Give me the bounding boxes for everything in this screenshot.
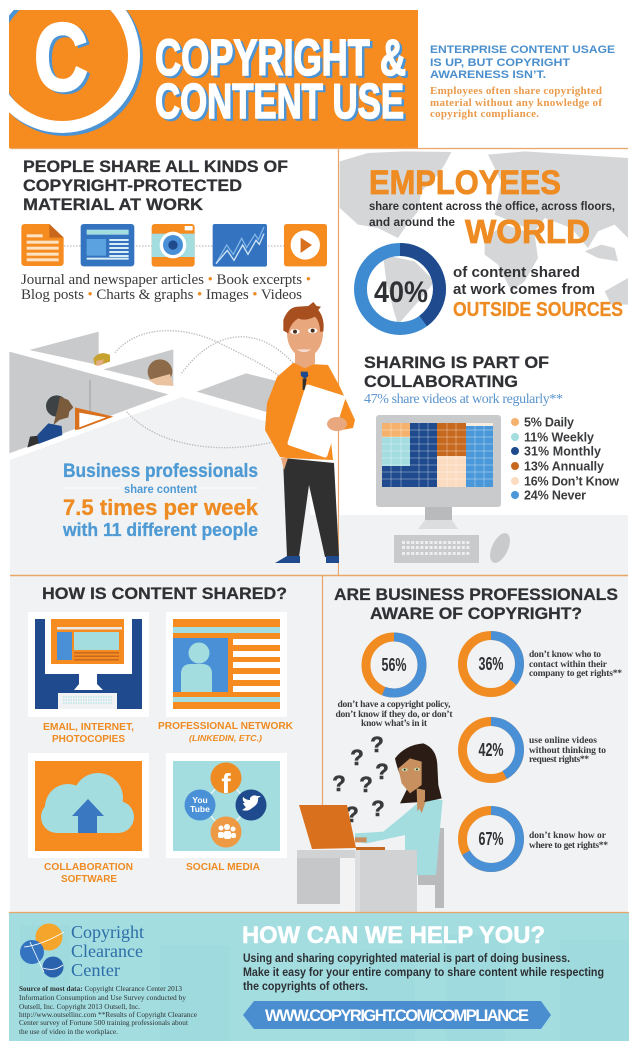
icon: cloud upload	[41, 773, 134, 833]
hand	[355, 837, 367, 842]
chart: 67% donut: 67%	[478, 829, 504, 849]
chart: 42% donut	[462, 722, 520, 778]
title: CONTENT USE	[155, 75, 404, 129]
legend	[511, 416, 619, 502]
text: online videos: use online videos	[529, 736, 597, 746]
illustration: businessman holding tablet	[265, 302, 355, 563]
copyright symbol: C	[34, 4, 88, 111]
heading: aware of copyright	[334, 586, 618, 623]
panel: employees world map background	[340, 151, 628, 325]
heading: sharing is part of collaborating: COLLABORATING	[364, 373, 518, 391]
label: SOFTWARE	[61, 873, 117, 885]
icon: document	[21, 224, 64, 266]
panel: lower left office floor	[10, 397, 628, 575]
copyright symbol: C	[37, 6, 91, 113]
monitor stand	[418, 507, 458, 529]
label: SOCIAL MEDIA	[186, 861, 260, 873]
coworker: man at computer	[27, 395, 73, 448]
chart: 56% donut: 56%	[382, 655, 406, 675]
title: CONTENT USE	[158, 77, 406, 131]
text: content types list	[21, 272, 311, 303]
header intro text: Employees often share copyrighted	[430, 85, 602, 97]
header intro text	[430, 44, 615, 120]
text: help description: Make it easy for your entire company to share content while respecting	[243, 967, 604, 979]
heading: people share	[23, 158, 288, 214]
panel: footer	[9, 912, 629, 1041]
text: help description: the copyrights of others.	[243, 981, 368, 993]
dotted connection arcs	[115, 331, 302, 448]
chart: 56% donut	[366, 637, 422, 693]
section divider lines	[10, 148, 628, 575]
logo: copyright clearance center: Center	[71, 960, 120, 980]
chart: 36% donut: 36%	[478, 654, 504, 674]
text: sources: Information Consumption and Use Survey conducted by	[19, 994, 187, 1002]
text: who to contact: contact within their	[529, 660, 608, 670]
label	[158, 720, 293, 743]
legend: 5% Daily	[524, 416, 574, 430]
text: sources: the use of video in the workplace.	[19, 1028, 118, 1036]
text: sources: http://www.outsellinc.com **Results of Copyright Clearance	[19, 1011, 197, 1019]
text: online videos	[529, 736, 606, 765]
heading: how can we help you: HOW CAN WE HELP YOU?	[242, 922, 545, 949]
call to action banner	[243, 1001, 551, 1029]
illustration: woman at laptop	[297, 743, 444, 912]
card: professional network	[158, 612, 293, 743]
heading: aware of copyright: AWARE OF COPYRIGHT?	[370, 605, 582, 623]
label: PROFESSIONAL NETWORK	[158, 720, 293, 732]
icon: question marks: ?	[332, 771, 346, 796]
chart: 42% donut: 42%	[478, 740, 504, 760]
title	[155, 29, 408, 131]
text: no copyright policy: don’t have a copyright policy,	[338, 700, 451, 710]
logo: copyright clearance center: Copyright	[71, 922, 144, 942]
heading: employees around the world	[369, 164, 615, 250]
coworker computer monitor	[75, 407, 113, 430]
icon: question marks: ?	[350, 745, 364, 770]
icon: question marks: ?	[375, 759, 389, 784]
header intro text: copyright compliance.	[430, 108, 539, 120]
icons row: content types	[21, 224, 327, 267]
panel: lower section background	[10, 576, 628, 912]
desk	[297, 850, 417, 912]
legend: 16% Don’t Know	[524, 474, 619, 488]
label: (LINKEDIN, ETC.)	[189, 733, 262, 743]
illustration: computer with treemap chart	[376, 415, 514, 566]
heading: employees around the world: WORLD	[465, 213, 590, 250]
heading: sharing is part of collaborating: SHARING IS PART OF	[364, 354, 549, 372]
label	[44, 861, 133, 885]
header banner	[0, 0, 418, 148]
icon: video play	[284, 224, 327, 266]
heading: people share: PEOPLE SHARE ALL KINDS OF	[23, 158, 288, 176]
icon: facebook: f	[221, 768, 231, 799]
label: PHOTOCOPIES	[52, 733, 125, 745]
card: social media	[166, 753, 287, 873]
legend: 31% Monthly	[524, 444, 601, 458]
header intro text: AWARENESS ISN’T.	[430, 69, 546, 81]
logo: copyright clearance center: Clearance	[71, 941, 143, 961]
text: sources: Outsell, Inc. Copyright 2013 Outsell, Inc.	[19, 1003, 140, 1011]
text: business professionals stat: share content	[124, 482, 197, 496]
text: online videos: request rights**	[529, 755, 589, 765]
text: help description	[243, 953, 604, 993]
text: who to contact	[529, 650, 622, 679]
header intro text: material without any knowledge of	[430, 97, 602, 109]
text: outside sources: of content shared	[453, 265, 580, 281]
keyboard	[394, 535, 479, 563]
icon: youtube: You	[192, 795, 208, 805]
icon: line chart	[213, 224, 267, 267]
tablet	[290, 387, 343, 455]
call to action banner: WWW.COPYRIGHT.COM/COMPLIANCE	[265, 1007, 529, 1025]
text: help description: Using and sharing copyrighted material is part of doing business.	[243, 953, 570, 965]
card: collaboration software	[28, 753, 149, 885]
text: outside sources: at work comes from	[453, 282, 595, 298]
body	[355, 798, 443, 875]
mouse	[486, 530, 514, 566]
icon: question marks: ?	[370, 732, 384, 757]
title: COPYRIGHT &	[158, 31, 408, 88]
text: no copyright policy	[336, 700, 453, 729]
logo: copyright clearance center	[20, 922, 144, 980]
icon: youtube	[184, 790, 216, 820]
text: sources: Center survey of Fortune 500 training professionals about	[19, 1019, 188, 1027]
icon: question marks	[332, 732, 389, 827]
icon: youtube: Tube	[190, 804, 210, 814]
coworker: blond head	[93, 353, 110, 366]
header intro text: IS UP, BUT COPYRIGHT	[430, 57, 570, 69]
text: business professionals stat	[62, 461, 259, 540]
text: content types list: Blog posts • Charts & graphs • Images • Videos	[21, 287, 302, 303]
heading: employees around the world: EMPLOYEES	[369, 164, 561, 202]
text: how or where: don’t know how or	[529, 831, 607, 841]
heading: aware of copyright: ARE BUSINESS PROFESSIONALS	[334, 586, 618, 604]
heading: employees around the world: share content across the office, across floors,	[369, 201, 615, 213]
heading: sharing is part of collaborating	[364, 354, 563, 407]
text: who to contact: don’t know who to	[529, 650, 601, 660]
text: sources: Source of most data: Copyright Clearance Center 2013	[19, 985, 183, 993]
icon: myspace	[210, 816, 242, 848]
sweater	[265, 363, 355, 460]
shoes	[275, 556, 351, 563]
icon: question marks: ?	[345, 802, 359, 827]
title: COPYRIGHT &	[155, 29, 406, 86]
heading: people share: COPYRIGHT-PROTECTED	[23, 177, 242, 195]
text: how or where	[529, 831, 608, 851]
neck and head	[283, 302, 324, 390]
header intro text: ENTERPRISE CONTENT USAGE	[430, 44, 615, 56]
text: who to contact: company to get rights**	[529, 669, 622, 679]
text: online videos: without thinking to	[529, 746, 606, 756]
legend: 24% Never	[524, 488, 586, 502]
chart: 67% donut	[462, 810, 520, 868]
text: how or where: where to get rights**	[529, 841, 608, 851]
icon: question marks: ?	[359, 772, 373, 797]
card: email internet photocopies	[28, 612, 149, 745]
illustration: office cubicles	[9, 332, 277, 453]
text: business professionals stat: with 11 different people	[62, 520, 258, 540]
hair and face	[395, 743, 442, 803]
text: business professionals stat: Business professionals	[63, 461, 258, 482]
icon: twitter	[236, 790, 266, 820]
label: COLLABORATION	[44, 861, 133, 873]
label	[43, 721, 134, 745]
treemap chart	[382, 423, 493, 487]
text: no copyright policy: don’t know if they do, or don’t	[336, 710, 453, 720]
text: outside sources	[453, 265, 623, 321]
label: EMAIL, INTERNET,	[43, 721, 134, 733]
text: sources	[19, 985, 197, 1036]
desk surface	[339, 515, 628, 575]
chart: 40% donut: 40%	[374, 276, 428, 309]
copyright symbol	[0, 0, 137, 130]
heading: sharing is part of collaborating: 47% share videos at work regularly**	[364, 392, 563, 407]
chair	[418, 828, 444, 908]
text: no copyright policy: know what’s in it	[361, 719, 428, 729]
trousers	[283, 458, 339, 557]
heading: employees around the world: and around the	[369, 217, 455, 229]
chart: 36% donut	[462, 636, 520, 692]
coworker: woman	[148, 359, 173, 386]
laptop	[299, 805, 385, 851]
text: content types list: Journal and newspaper articles • Book excerpts •	[21, 272, 311, 288]
icon: question marks: ?	[371, 796, 385, 821]
legend: 13% Annually	[524, 460, 604, 474]
legend: 11% Weekly	[524, 430, 594, 444]
heading: people share: MATERIAL AT WORK	[23, 196, 203, 214]
hand	[327, 417, 347, 431]
heading: how is content shared: HOW IS CONTENT SHARED?	[42, 585, 287, 603]
icon: camera	[152, 224, 195, 267]
icon: newspaper	[81, 224, 134, 266]
chart: 40% donut	[360, 250, 440, 328]
text: business professionals stat: 7.5 times per week	[63, 495, 259, 520]
